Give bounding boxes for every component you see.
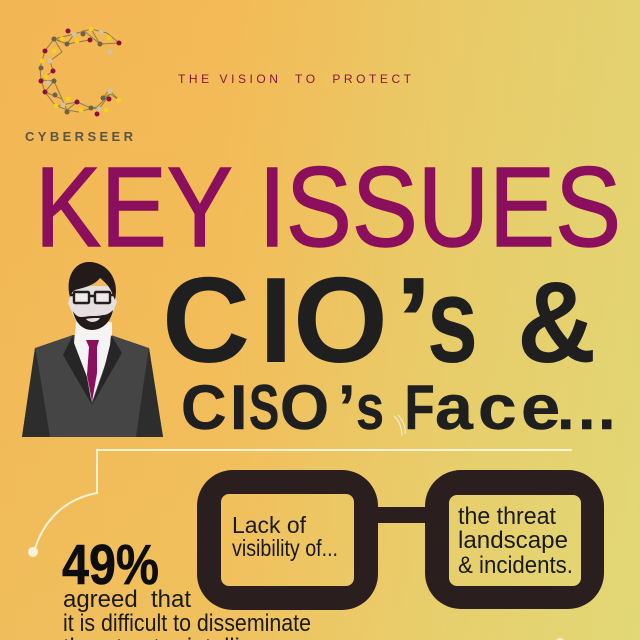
left lapel bbox=[63, 335, 92, 405]
dot at bottom right bbox=[556, 638, 564, 640]
left lens bbox=[197, 470, 378, 610]
logo: Cyberseer network C bbox=[38, 26, 122, 116]
heading: CIO's &: O bbox=[293, 252, 388, 388]
left lens text bbox=[232, 512, 338, 561]
shirt and collar bbox=[74, 322, 112, 402]
eyeglasses bbox=[70, 292, 115, 303]
glasses graphic bbox=[197, 470, 604, 610]
statistic: 49%: 49% bbox=[62, 533, 159, 597]
heading: CISO's Face...: I bbox=[230, 373, 248, 443]
heading: CISO's Face...: . bbox=[578, 373, 596, 443]
tagline: THE VISION TO PROTECT bbox=[178, 72, 412, 86]
heading: CISO's Face... bbox=[181, 372, 616, 443]
heading: CIO's &: & bbox=[517, 258, 596, 387]
heading: CIO's &: ’ bbox=[394, 252, 433, 388]
logo wordmark: CYBERSEER bbox=[25, 129, 134, 144]
beard bbox=[73, 310, 113, 330]
right lens text: the threat bbox=[458, 503, 556, 530]
heading: CISO's Face...: ’ bbox=[338, 373, 356, 443]
right lens bbox=[425, 470, 604, 609]
left lens text: visibility of... bbox=[232, 535, 338, 561]
left lens text: Lack of bbox=[232, 512, 307, 538]
right lens text bbox=[458, 503, 573, 579]
right lapel bbox=[92, 335, 122, 405]
bridge bbox=[370, 507, 430, 523]
heading: CISO's Face...: O bbox=[280, 373, 329, 443]
heading: CIO's &: I bbox=[259, 252, 293, 388]
tie bbox=[86, 340, 99, 402]
heading: CISO's Face...: S bbox=[249, 372, 279, 443]
heading: CISO's Face...: a bbox=[435, 372, 473, 442]
heading: CISO's Face...: e bbox=[521, 372, 560, 443]
icon: bearded businessman bbox=[22, 262, 163, 437]
face bbox=[68, 286, 117, 330]
statistic description: it is difficult to disseminate bbox=[63, 610, 311, 637]
heading: CIO's &: C bbox=[162, 252, 250, 388]
hair bbox=[69, 262, 116, 300]
heading: CIO's &: s bbox=[427, 251, 478, 388]
jacket bbox=[22, 335, 163, 437]
heading: CIO's & bbox=[162, 251, 596, 388]
heading: CISO's Face...: s bbox=[356, 373, 384, 443]
right lens text: landscape bbox=[458, 527, 568, 554]
heading: CISO's Face...: c bbox=[478, 373, 517, 443]
heading: CISO's Face...: . bbox=[557, 373, 575, 443]
heading: CISO's Face...: . bbox=[598, 373, 616, 443]
connector line with dot bbox=[28, 450, 572, 557]
statistic description bbox=[63, 586, 311, 640]
statistic description: agreed that bbox=[63, 586, 191, 613]
heading: CISO's Face...: F bbox=[405, 372, 435, 442]
small white swoosh bbox=[394, 415, 405, 436]
right lens text: & incidents. bbox=[458, 552, 573, 579]
heading: CISO's Face...: C bbox=[181, 373, 226, 443]
